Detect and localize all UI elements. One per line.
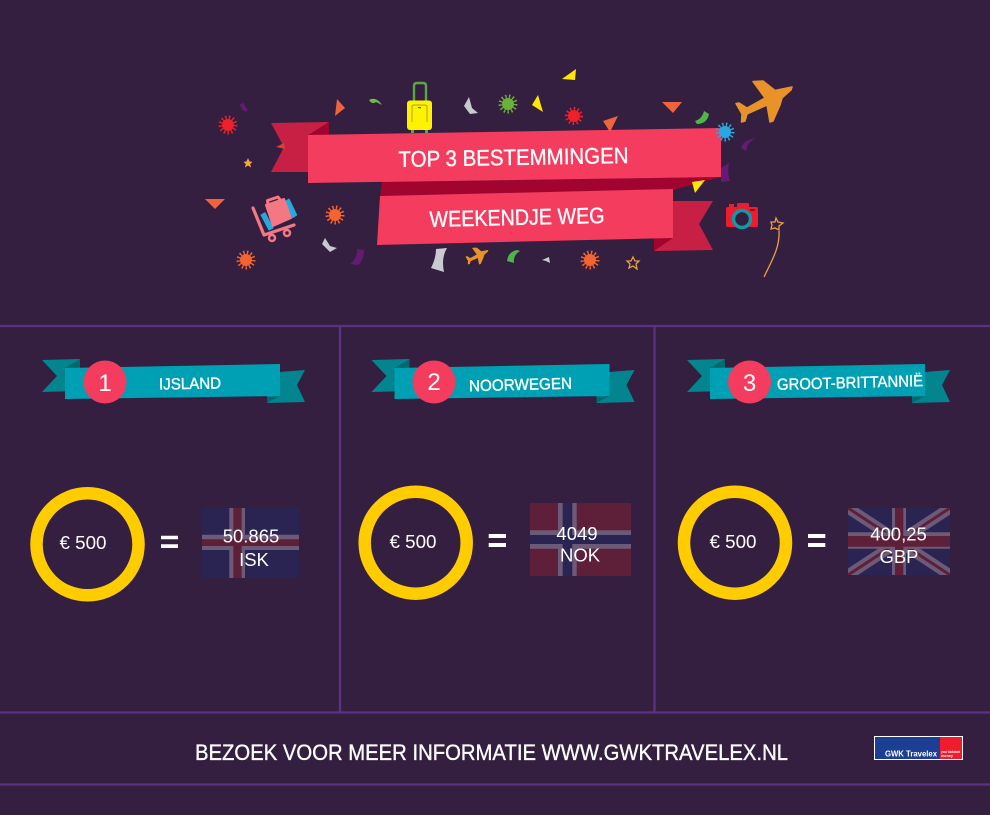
panel: IJsland <box>36 359 305 595</box>
burst: blue <box>718 125 732 139</box>
ribbon fold: right <box>654 238 673 251</box>
country name: IJsland: IJSLAND <box>159 375 221 394</box>
coin: 500 euro <box>365 492 467 594</box>
ribbon: Groot-Brittannië <box>687 359 950 403</box>
ribbon: bottom <box>377 189 673 245</box>
heading: weekendje weg: WEEKENDJE WEG <box>429 203 605 232</box>
flag: United Kingdom with amount <box>848 508 950 575</box>
number badge 3: 3 <box>743 370 756 397</box>
flag: United Kingdom with amount: GBP <box>879 546 919 567</box>
curved confetti: grey <box>322 97 550 272</box>
burst: orange centre-left <box>328 208 342 222</box>
star: small gold <box>244 158 252 168</box>
equals sign <box>808 534 825 547</box>
flag: Norway with amount: 4049 <box>556 523 598 544</box>
ribbon tail: left <box>271 122 329 172</box>
logo: GWK Travelex <box>874 736 962 760</box>
number badge 2: 2 <box>427 369 441 396</box>
burst: orange lower-right <box>583 253 597 267</box>
logo: GWK Travelex: money <box>941 754 953 758</box>
ribbon: Noorwegen <box>372 359 634 403</box>
curved confetti: green <box>369 99 709 263</box>
flag: Iceland with amount: ISK <box>239 549 270 570</box>
logo: GWK Travelex: GWK Travelex <box>885 748 937 758</box>
panel: Groot-Brittannië <box>684 359 950 594</box>
burst: red top <box>568 110 580 122</box>
equals sign <box>161 536 178 548</box>
number badge 2 <box>412 360 456 404</box>
coin: 500 euro: € 500 <box>60 532 106 553</box>
ribbon connector <box>380 177 721 197</box>
number badge 1 <box>84 360 126 404</box>
triangles <box>205 69 705 209</box>
number badge 1: 1 <box>98 370 112 397</box>
country name: Groot-Brittannië: GROOT-BRITTANNIË <box>777 372 923 394</box>
ribbon tail: right <box>654 201 713 251</box>
burst: red left <box>221 118 235 132</box>
icon: shooting star <box>764 218 783 277</box>
icon: large orange plane <box>736 81 792 122</box>
logo: GWK Travelex: your kickstart <box>941 750 961 754</box>
equals sign <box>489 534 506 547</box>
ribbon: top <box>308 128 721 183</box>
curved confetti: purple <box>240 103 756 265</box>
ribbon fold: left <box>308 122 329 135</box>
title banner <box>271 122 721 251</box>
flag: United Kingdom with amount: 400,25 <box>870 524 927 545</box>
footer call to action: BEZOEK VOOR MEER INFORMATIE WWW.GWKTRAVELEX.NL <box>195 740 788 765</box>
icon: luggage cart <box>253 197 297 241</box>
icon: small orange plane <box>466 248 488 264</box>
coin: 500 euro: € 500 <box>390 531 436 552</box>
number badge 3 <box>728 360 771 404</box>
flag: Iceland with amount <box>202 508 299 578</box>
heading: top 3 bestemmingen: TOP 3 BESTEMMINGEN <box>398 143 629 172</box>
burst: green <box>501 97 515 111</box>
burst: orange lower-left <box>239 253 253 267</box>
flag: Norway with amount: NOK <box>560 545 601 566</box>
ribbon: IJsland <box>42 359 305 403</box>
country name: Noorwegen: NOORWEGEN <box>469 376 572 395</box>
coin: 500 euro <box>36 493 138 595</box>
confetti decorations <box>205 69 756 272</box>
flag: Norway with amount <box>530 503 631 576</box>
icon: yellow suitcase <box>407 83 432 133</box>
star: outline lower <box>627 257 639 269</box>
small orange confetti behind tail <box>276 143 285 149</box>
flag: Iceland with amount: 50.865 <box>223 526 279 547</box>
coin: 500 euro <box>684 492 786 594</box>
coin: 500 euro: € 500 <box>710 531 756 552</box>
panel: Noorwegen <box>365 359 634 594</box>
icon: red camera <box>726 203 758 228</box>
